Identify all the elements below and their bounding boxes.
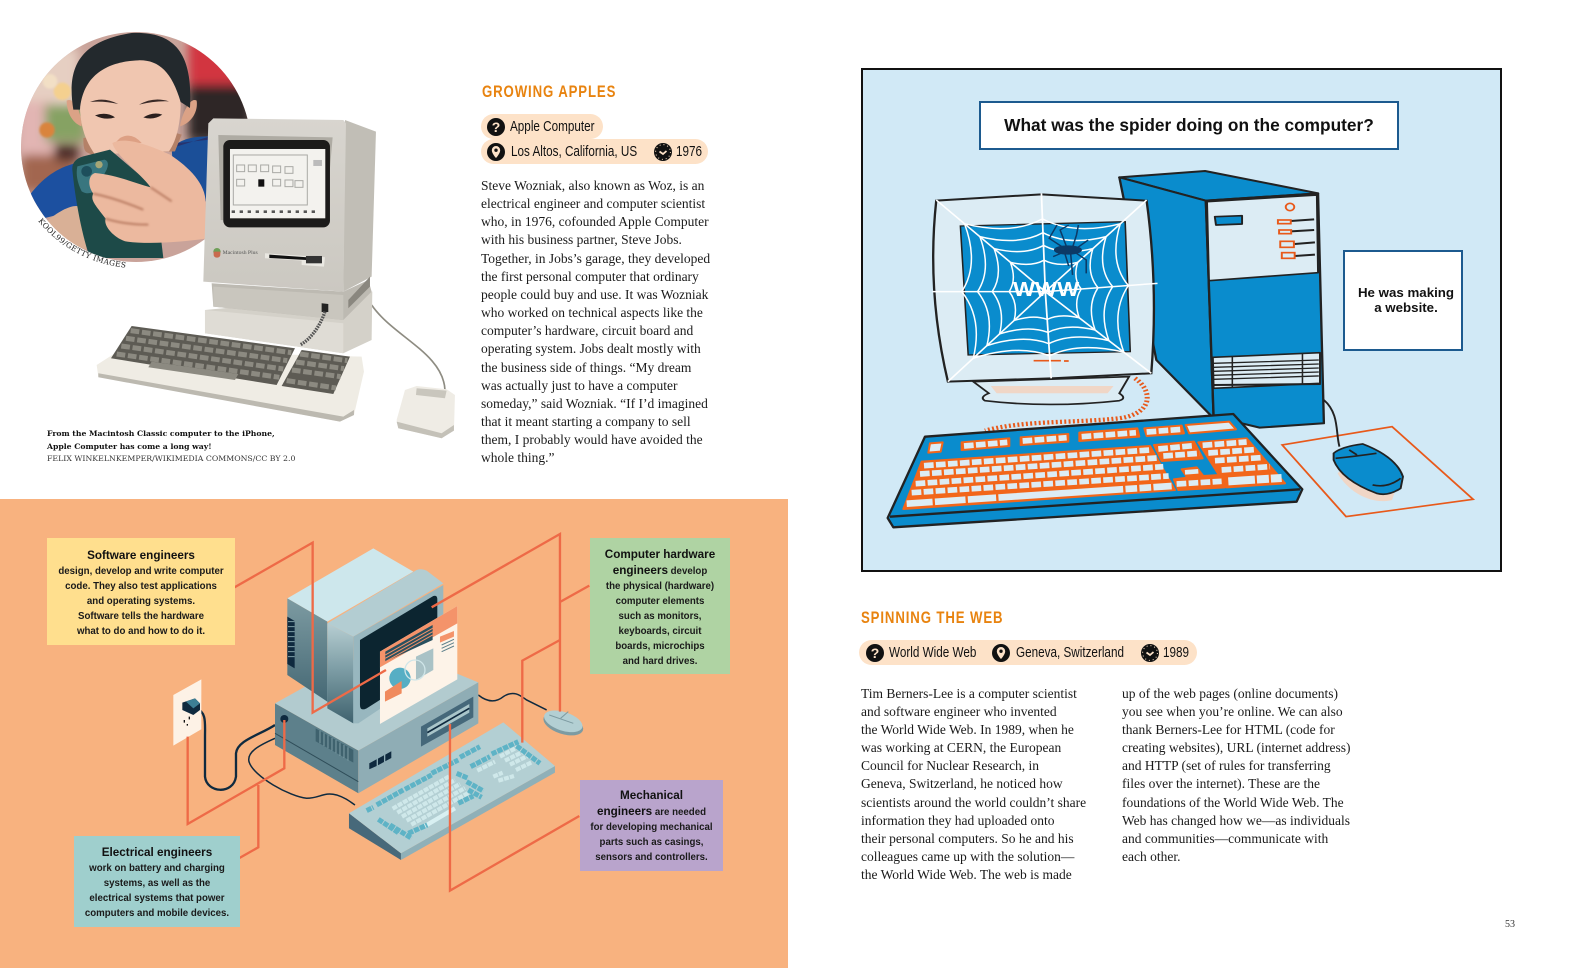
fact pill: Apple Computer [481, 114, 603, 139]
callout: electrical engineers: electrical systems that power [89, 893, 225, 904]
diagram: isometric computer with engineer callout lines [173, 532, 590, 892]
text block: Steve Wozniak [481, 178, 710, 465]
web letters: WWW [1013, 278, 1080, 301]
icon: question mark: ? [871, 644, 879, 660]
text block: Steve Wozniak: the first personal computer that ordinary [481, 269, 699, 284]
text block: Tim Berners-Lee, column one: information they had uploaded onto [861, 813, 1054, 828]
computer base unit [275, 643, 478, 793]
text block: Steve Wozniak: who worked on technical aspects like the [481, 305, 703, 320]
speech box: question [979, 101, 1399, 150]
text block: Tim Berners-Lee, column one: colleagues came up with the solution— [861, 849, 1074, 864]
text block: Tim Berners-Lee, column one: Geneva, Switzerland, he noticed how [861, 776, 1063, 791]
callout: mechanical engineers: for developing mechanical [590, 822, 713, 833]
text block: Tim Berners-Lee, column two: thank Berners-Lee for HTML (code for [1122, 722, 1335, 737]
keyboard [349, 722, 555, 860]
callout: electrical engineers: work on battery and charging [89, 863, 225, 874]
text block: Tim Berners-Lee, column two: and communities—communicate with [1122, 831, 1328, 846]
text block: Tim Berners-Lee, column two: and HTTP (set of rules for transferring [1122, 758, 1331, 773]
callout: software engineers [47, 538, 235, 645]
icon: clock [1141, 644, 1159, 662]
text block: Steve Wozniak: computer’s hardware, circuit board and [481, 323, 693, 338]
callout: electrical engineers: Electrical engineers [102, 846, 212, 859]
callout: computer hardware engineers [590, 538, 730, 674]
callout: computer hardware engineers: such as monitors, [619, 611, 701, 622]
callout: software engineers: Software engineers [87, 549, 195, 562]
spider [1049, 225, 1088, 275]
speech box: answer [1343, 250, 1463, 351]
text block: Tim Berners-Lee, column two: up of the web pages (online documents) [1122, 686, 1338, 701]
wires [196, 693, 547, 805]
text block: Steve Wozniak: that it meant starting a company to sell [481, 414, 691, 429]
monitor [287, 548, 443, 723]
icon: question mark: ? [492, 118, 500, 134]
callout: software engineers: what to do and how to do it. [77, 626, 205, 637]
caption: Macintosh to iPhone: From the Macintosh Classic computer to the iPhone, [47, 429, 275, 438]
fact pill: World Wide Web, Geneva, 1989: World Wide Web [889, 644, 976, 660]
text block: Tim Berners-Lee, column two: you see when you’re online. We can also [1122, 704, 1343, 719]
keyboard [888, 414, 1302, 527]
callout: software engineers: and operating systems. [87, 596, 195, 607]
Macintosh computer [97, 118, 455, 438]
photo: girl with phone and Macintosh computer [21, 32, 455, 438]
icon: location pin [992, 644, 1010, 662]
text block: Tim Berners-Lee, column one [861, 686, 1086, 882]
text block: Tim Berners-Lee, column one: scientists around the world couldn’t share [861, 795, 1086, 810]
mouse pad and mouse [1282, 400, 1473, 517]
text block: Tim Berners-Lee, column two: foundations of the World Wide Web. The [1122, 795, 1344, 810]
panel: spider joke cartoon [861, 68, 1502, 572]
text block: Tim Berners-Lee, column one: was working at CERN, the European [861, 740, 1061, 755]
callout: mechanical engineers: Mechanical [620, 789, 683, 802]
callout: computer hardware engineers: engineers develop [613, 564, 707, 577]
panel: orange engineers background [0, 499, 788, 968]
text block: Steve Wozniak: the business side of things. “My dream [481, 360, 691, 375]
text block: Tim Berners-Lee, column one: and software engineer who invented [861, 704, 1057, 719]
fact pill: location and year: Los Altos, California, US [511, 142, 637, 160]
callout: mechanical engineers [580, 780, 723, 871]
callout: electrical engineers [74, 836, 240, 927]
callout: electrical engineers: computers and mobile devices. [85, 908, 229, 919]
text block: Tim Berners-Lee, column two: Web has changed how we—as individuals [1122, 813, 1350, 828]
fact pill: World Wide Web, Geneva, 1989 [859, 640, 1197, 665]
callout: computer hardware engineers: and hard drives. [623, 656, 697, 667]
text block: Tim Berners-Lee, column one: Tim Berners-Lee is a computer scientist [861, 686, 1077, 701]
heading: Growing Apples: GROWING APPLES [482, 82, 616, 100]
callout: mechanical engineers: parts such as casings, [600, 837, 703, 848]
text block: Tim Berners-Lee, column one: the World Wide Web. The web is made [861, 867, 1072, 882]
fact pill: World Wide Web, Geneva, 1989: 1989 [1163, 644, 1189, 660]
caption: Macintosh to iPhone: FELIX WINKELNKEMPER/WIKIMEDIA COMMONS/CC BY 2.0 [47, 454, 295, 463]
speech box: question: What was the spider doing on the computer? [1004, 115, 1374, 135]
text block: Steve Wozniak: electrical engineer and computer scientist [481, 196, 705, 211]
text block: Steve Wozniak: whole thing.” [481, 450, 554, 465]
fact pill: location and year [481, 139, 708, 164]
callout lines [188, 534, 589, 891]
text block: Steve Wozniak: with his business partner, Steve Jobs. [481, 232, 682, 247]
speech box: answer: a website. [1374, 300, 1438, 315]
mouse [541, 706, 586, 740]
wall outlet [173, 679, 201, 746]
photo credit: Kool99: KOOL99/GETTY IMAGES [38, 218, 126, 268]
text block: Steve Wozniak: Together, in Jobs’s garage, they developed [481, 251, 710, 266]
callout: software engineers: Software tells the hardware [78, 611, 204, 622]
callout: electrical engineers: systems, as well as the [104, 878, 210, 889]
text block: Steve Wozniak: Steve Wozniak, also known as Woz, is an [481, 178, 704, 193]
fact pill: Apple Computer: Apple Computer [510, 118, 595, 134]
icon: question mark [866, 644, 884, 662]
text block: Tim Berners-Lee, column one: the World Wide Web. In 1989, when he [861, 722, 1074, 737]
text block: Steve Wozniak: someday,” said Wozniak. “If I’d imagined [481, 396, 708, 411]
text block: Tim Berners-Lee, column one: their personal computers. So he and his [861, 831, 1074, 846]
text block: Steve Wozniak: them, I probably would have avoided the [481, 432, 703, 447]
text block: Tim Berners-Lee, column two: each other. [1122, 849, 1180, 864]
icon: location pin [487, 143, 505, 161]
heading: Spinning the Web: SPINNING THE WEB [861, 608, 1003, 626]
callout: computer hardware engineers: keyboards, circuit [619, 626, 701, 637]
fact pill: World Wide Web, Geneva, 1989: Geneva, Switzerland [1016, 644, 1124, 660]
Macintosh computer: Macintosh Plus [223, 250, 258, 256]
text block: Tim Berners-Lee, column two [1122, 686, 1351, 864]
website window [380, 606, 457, 724]
callout: computer hardware engineers: computer elements [616, 596, 704, 607]
caption: Macintosh to iPhone [46, 429, 295, 463]
callout: computer hardware engineers: boards, microchips [615, 641, 705, 652]
fact pill: location and year: 1976 [676, 142, 702, 160]
callout: mechanical engineers: engineers are needed [597, 805, 706, 818]
page number: 53 [1505, 919, 1515, 930]
monitor stand and coil cord [973, 377, 1147, 431]
text block: Tim Berners-Lee, column two: files over the internet). These are the [1122, 776, 1320, 791]
computer tower [1119, 171, 1324, 428]
callout: computer hardware engineers: Computer hardware [605, 548, 715, 561]
monitor with spider web [932, 193, 1158, 382]
photo circle: girl looking at phone [15, 28, 255, 268]
icon: question mark [487, 118, 505, 136]
text block: Tim Berners-Lee, column two: creating websites), URL (internet address) [1122, 740, 1351, 755]
text block: Steve Wozniak: who, in 1976, cofounded Apple Computer [481, 214, 709, 229]
icon: clock [654, 143, 672, 161]
caption: Macintosh to iPhone: Apple Computer has come a long way! [47, 442, 212, 451]
text block: Steve Wozniak: people could buy and use. It was Wozniak [481, 287, 708, 302]
text block: Steve Wozniak: operating system. Jobs dealt mostly with [481, 341, 701, 356]
callout: software engineers: design, develop and write computer [58, 566, 224, 577]
callout: mechanical engineers: sensors and controllers. [595, 852, 708, 863]
text block: Steve Wozniak: was actually just to have a computer [481, 378, 677, 393]
callout: software engineers: code. They also test applications [65, 581, 217, 592]
speech box: answer: He was making [1358, 285, 1454, 300]
text block: Tim Berners-Lee, column one: Council for Nuclear Research, in [861, 758, 1039, 773]
callout: computer hardware engineers: the physical (hardware) [606, 581, 714, 592]
